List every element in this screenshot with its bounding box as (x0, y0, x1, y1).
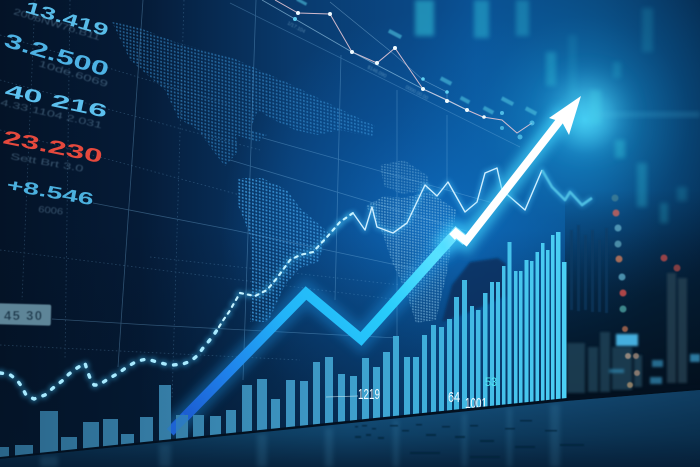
floor surface (0, 384, 700, 467)
top line chart with markers: 0000.00.00 (404, 84, 429, 102)
world map: dotted continents (112, 22, 456, 323)
bar labels: 53 (485, 375, 497, 389)
blurred print marks on floor (355, 420, 584, 458)
main arrow: foreground where it crosses first bar (170, 416, 186, 432)
blurred secondary rows: Sett Brt 3.0 (10, 151, 84, 174)
blurred secondary rows (0, 6, 109, 217)
map: africa and europe (366, 192, 456, 323)
blurred secondary rows: 6006 (38, 204, 64, 217)
value: 40 216: 40 216 (3, 80, 109, 122)
top-right blurred data columns (415, 0, 687, 223)
map: south america (237, 178, 328, 322)
value: +8.546: +8.546 (5, 175, 95, 209)
map: north america (112, 22, 375, 166)
thin white line chart (330, 168, 592, 233)
dotted glowing line (0, 213, 353, 399)
glowing arrow upper shaft and head (440, 82, 700, 250)
top line chart with markers: 1/17.104 (286, 20, 306, 35)
blurred secondary rows: 10de.6069 (37, 58, 109, 89)
value: 23.230: 23.230 (1, 127, 104, 168)
bar chart (0, 232, 566, 467)
bar labels: 1219 (358, 386, 380, 403)
data text column (1, 0, 111, 209)
blurred secondary rows: 4.33 1104 2.031 (0, 97, 103, 130)
top line chart with markers: $146.090 (366, 64, 387, 80)
blurred secondary rows: 2006NW7b.B11 (12, 6, 101, 42)
top line chart with markers (262, 0, 537, 139)
label box: 45 30 (0, 303, 51, 326)
main arrow: lower trend behind bars (170, 233, 466, 432)
bar labels: 64 (448, 389, 460, 406)
bar labels (326, 375, 497, 412)
right blurred panel: dark columns and city-like bars (567, 194, 700, 393)
bar labels: 1001 (465, 395, 487, 412)
dark landmass behind bars (442, 258, 506, 322)
label box: 45 30: 45 30 (4, 308, 42, 323)
grid lines (0, 0, 520, 400)
floor bar reflections (40, 404, 560, 467)
value: 3.2.500: 3.2.500 (2, 30, 111, 81)
